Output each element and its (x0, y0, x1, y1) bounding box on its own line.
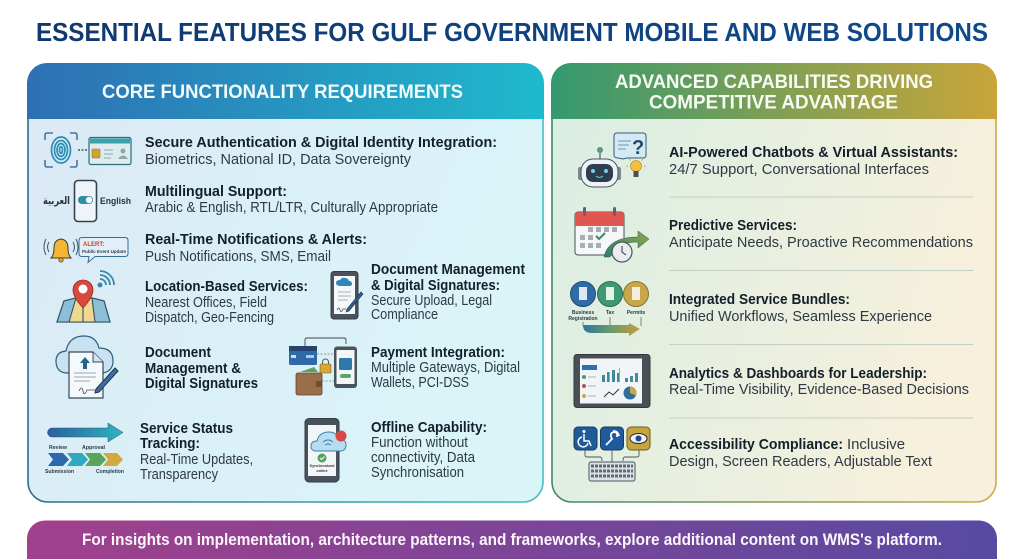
text: secure authentication (145, 134, 497, 168)
icon: chatbot with speech bubble and bulb: ? (632, 137, 644, 159)
text: payment integration: Multiple Gateways, Digital (371, 360, 520, 376)
icon: offline phone with cloud: Synchronized (310, 464, 335, 468)
icon: status tracking arrow and chevrons (45, 423, 124, 475)
text: location-based services: Dispatch, Geo-Fencing (145, 310, 274, 326)
icon: analytics tablet dashboard (574, 354, 650, 408)
text: analytics and dashboards (669, 365, 969, 398)
icon: fingerprint and ID card (45, 133, 131, 167)
text: multilingual support: Multilingual Support: (145, 183, 287, 200)
text: document management: Management & (145, 360, 241, 377)
text: document management and digital signatures: Compliance (371, 307, 438, 323)
icon: language toggle phone: English (100, 196, 131, 207)
icon: status tracking arrow and chevrons: Submission (45, 469, 74, 475)
icon: service bundle circles with arrow: Registration (568, 316, 598, 322)
icon: calendar, arrow and clock (575, 207, 649, 262)
panel: core functionality requirements (27, 63, 544, 502)
text: service status tracking: Service Status (140, 420, 233, 437)
text: document management and digital signatures: Document Management (371, 261, 525, 278)
text: AI-powered chatbots: 24/7 Support, Conversational Interfaces (669, 162, 929, 178)
text: payment integration: Payment Integration: (371, 344, 505, 361)
text: secure authentication: Secure Authentication & Digital Identity Integration: (145, 134, 497, 151)
text: integrated service bundles (669, 291, 932, 325)
icon: map pin and signal (57, 271, 114, 322)
icon: service bundle circles with arrow: Business (572, 310, 594, 316)
text: payment integration: Wallets, PCI-DSS (371, 375, 469, 391)
icon: accessibility tiles and keyboard (574, 427, 650, 481)
footer banner (27, 520, 997, 559)
text: location-based services: Nearest Offices, Field (145, 295, 267, 311)
icon: language toggle phone: العربية (43, 195, 70, 207)
icon: language toggle phone (43, 180, 131, 222)
text: payment integration (371, 344, 520, 391)
text: predictive services: Predictive Services: (669, 217, 797, 234)
text: real-time notifications: Push Notifications, SMS, Email (145, 249, 331, 265)
icon: status tracking arrow and chevrons: Approval (82, 445, 106, 451)
icon: alert bell (44, 238, 128, 262)
text: offline capability (371, 419, 487, 481)
panel background (28, 64, 543, 502)
text: document management: Digital Signatures (145, 375, 258, 392)
text: AI-powered chatbots (669, 144, 958, 178)
icon: service bundle circles with arrow: Permits (627, 310, 645, 316)
text: location-based services: Location-Based Services: (145, 278, 308, 295)
panel background (552, 64, 996, 502)
text: offline capability: Function without (371, 435, 468, 451)
icon: chatbot with speech bubble and bulb (578, 133, 646, 187)
text: real-time notifications: Real-Time Notifications & Alerts: (145, 231, 367, 248)
icon: service bundle circles with arrow (568, 282, 648, 336)
text: offline capability: Offline Capability: (371, 419, 487, 436)
panel: advanced capabilities (551, 63, 997, 502)
text: offline capability: Synchronisation (371, 465, 464, 481)
text: accessibility compliance: Inclusive (847, 437, 905, 453)
text: document management and digital signatures: & Digital Signatures: (371, 277, 500, 294)
icon: status tracking arrow and chevrons: Review (49, 445, 67, 451)
icon: offline phone with cloud: online (316, 469, 328, 473)
panel header band (551, 63, 997, 119)
text: offline capability: connectivity, Data (371, 450, 476, 466)
text: multilingual support (145, 183, 438, 216)
panel heading: ADVANCED CAPABILITIES DRIVING (615, 72, 933, 93)
text: location-based services (145, 278, 308, 326)
text: integrated service bundles: Unified Workflows, Seamless Experience (669, 309, 932, 325)
text: predictive services (669, 217, 973, 251)
icon: cloud document and pen (56, 336, 118, 398)
icon: phone document signature (331, 272, 363, 319)
title: ESSENTIAL FEATURES FOR GULF GOVERNMENT MOBILE AND WEB SOLUTIONS (36, 19, 988, 47)
text: accessibility compliance: Accessibility Compliance: (669, 436, 843, 453)
text: secure authentication: Biometrics, National ID, Data Sovereignty (145, 152, 412, 168)
text: accessibility compliance: Design, Screen Readers, Adjustable Text (669, 454, 932, 470)
panel heading: CORE FUNCTIONALITY REQUIREMENTS (102, 82, 463, 103)
panel heading (615, 72, 933, 114)
text: document management and digital signatures (371, 261, 525, 323)
icon: service bundle circles with arrow: Tax (606, 310, 614, 316)
text: integrated service bundles: Integrated Service Bundles: (669, 291, 850, 308)
icon: alert bell: Public Event Update (82, 249, 126, 254)
text: analytics and dashboards: Real-Time Visibility, Evidence-Based Decisions (669, 382, 969, 398)
text: document management (145, 344, 258, 392)
panel heading: COMPETITIVE ADVANTAGE (649, 92, 898, 114)
text: document management and digital signatures: Secure Upload, Legal (371, 293, 492, 309)
text: document management: Document (145, 344, 211, 361)
text: AI-powered chatbots: AI-Powered Chatbots & Virtual Assistants: (669, 144, 958, 161)
text: service status tracking: Tracking: (140, 435, 200, 452)
text: service status tracking: Transparency (140, 467, 219, 483)
icon: alert bell: ALERT: (83, 242, 104, 248)
text: predictive services: Anticipate Needs, Proactive Recommendations (669, 235, 973, 251)
footer text: For insights on implementation, architecture patterns, and frameworks, explore additional content on WMS's platform. (82, 531, 942, 549)
text: accessibility compliance (669, 436, 932, 470)
text: service status tracking (140, 420, 253, 483)
text: service status tracking: Real-Time Updates, (140, 452, 253, 468)
panel header band (27, 63, 544, 119)
text: analytics and dashboards: Analytics & Dashboards for Leadership: (669, 365, 927, 382)
icon: offline phone with cloud (305, 418, 346, 482)
icon: status tracking arrow and chevrons: Completion (96, 469, 124, 475)
icon: card wallet and phone payment (289, 338, 357, 395)
text: multilingual support: Arabic & English, RTL/LTR, Culturally Appropriate (145, 200, 438, 216)
text: real-time notifications (145, 231, 367, 265)
